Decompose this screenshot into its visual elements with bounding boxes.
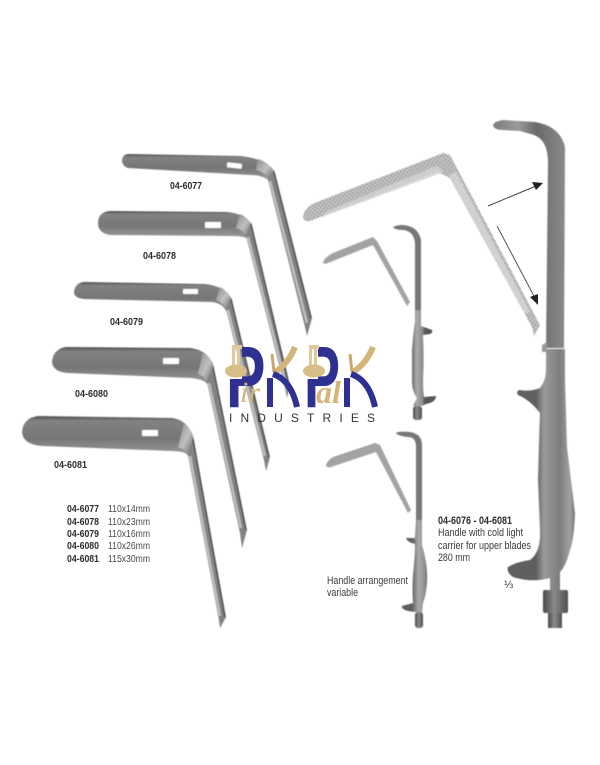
- letter P one: P: [226, 329, 265, 426]
- note: handle arrangement: variable: [327, 587, 358, 599]
- description: handle with cold light carrier: [438, 515, 531, 564]
- icon: hammer two: [303, 345, 325, 378]
- small textured blade, upper: [323, 237, 410, 306]
- small textured blade, lower: [326, 443, 411, 513]
- description: handle with cold light carrier: 280 mm: [438, 552, 470, 564]
- size table: 115x30mm: [108, 554, 150, 565]
- letter P two: P: [304, 329, 340, 426]
- size table: 04-6079: [67, 529, 99, 540]
- icon: hammer one: [225, 345, 247, 378]
- medium handle, upper: [393, 225, 436, 420]
- size table: 110x23mm: [108, 517, 150, 528]
- icon: pliers K one: [270, 347, 297, 407]
- size table: 04-6077: [67, 504, 99, 515]
- size table: 04-6080: [67, 541, 99, 552]
- product code labels: 04-6081: [54, 460, 87, 471]
- medium handle, lower: [396, 432, 427, 628]
- size table: 110x26mm: [108, 541, 150, 552]
- wordmark INDUSTRIES: INDUSTRIES: [229, 411, 375, 425]
- retractor blade 04-6079: [74, 282, 270, 471]
- product code labels: [54, 181, 202, 471]
- retractor blade 04-6080: [52, 347, 247, 548]
- size table: 04-6081: [67, 554, 99, 565]
- size table: 110x16mm: [108, 529, 150, 540]
- description: handle with cold light carrier: Handle with cold light: [438, 527, 523, 539]
- description: handle with cold light carrier: 04-6076 - 04-6081: [438, 515, 512, 527]
- retractor blade 04-6081: [22, 416, 226, 628]
- size table: 110x14mm: [108, 504, 150, 515]
- icon: pliers K two: [347, 347, 375, 407]
- product code labels: 04-6080: [75, 389, 108, 400]
- scale fraction: ⅓: [504, 579, 513, 591]
- size table: [67, 504, 150, 565]
- note: handle arrangement: Handle arrangement: [327, 575, 408, 587]
- large textured blade: [303, 153, 540, 336]
- product code labels: 04-6079: [110, 317, 143, 328]
- tan script ir: ir: [240, 376, 260, 409]
- product code labels: 04-6077: [170, 181, 202, 192]
- logo: PikPak Industries: [225, 345, 378, 422]
- tan script al: al: [316, 374, 341, 410]
- arrow: toward handle: [488, 182, 543, 206]
- large handle with light carrier: [493, 120, 575, 628]
- arrow: toward blade tip: [497, 226, 538, 305]
- description: handle with cold light carrier: carrier for upper blades: [438, 540, 531, 552]
- note: handle arrangement: [327, 575, 408, 599]
- size table: 04-6078: [67, 517, 99, 528]
- retractor blade 04-6077: [122, 154, 312, 336]
- retractor blade 04-6078: [98, 211, 290, 398]
- product code labels: 04-6078: [143, 251, 176, 262]
